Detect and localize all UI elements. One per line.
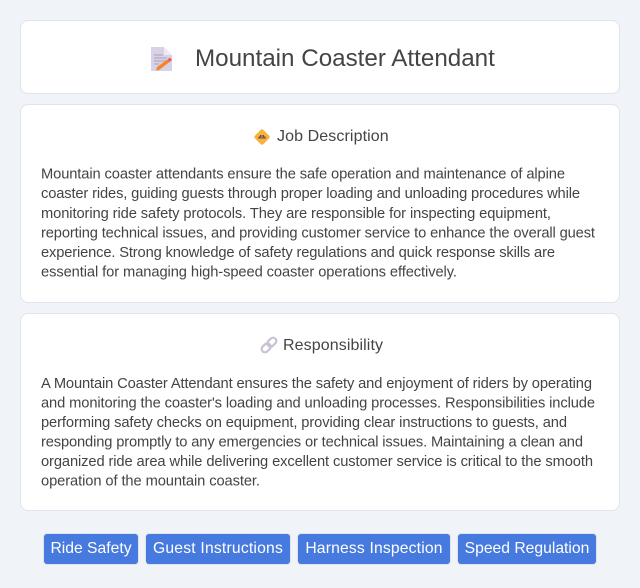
icon: link [260,336,278,354]
icon: orange diamond sign [254,129,270,145]
heading: job description: Job Description [277,128,389,145]
icon: memo with pencil [151,47,172,71]
tag: speed regulation: Speed Regulation [465,540,589,557]
text block: job description [41,166,595,280]
title text: Mountain Coaster Attendant [195,45,495,72]
text block: responsibility: organized ride area while delivering excellent customer service is critical to the smooth [41,454,593,470]
text block: job description: reporting technical issues, and providing customer service to enhance the overall guest [41,226,595,242]
tag: guest instructions [146,534,290,564]
tag: ride safety [44,534,138,564]
text block: job description: essential for managing high-speed coaster operations effectively. [41,264,457,280]
text block: job description: coaster rides, guiding guests through proper loading and unloading procedures while [41,186,580,202]
text block: job description: experience. Strong knowledge of safety regulations and quick response skills are [41,245,555,261]
text block: job description: Mountain coaster attendants ensure the safe operation and maintenance of alpine [41,166,565,182]
panel: job description [20,104,620,303]
panel: responsibility [20,313,620,511]
tag: harness inspection [298,534,450,564]
text block: responsibility [41,376,595,490]
tag: ride safety: Ride Safety [50,540,132,557]
tag: speed regulation [458,534,596,564]
text block: job description: monitoring ride safety protocols. They are responsible for inspecting equipment, [41,206,551,222]
tag: harness inspection: Harness Inspection [305,540,443,557]
text block: responsibility: A Mountain Coaster Attendant ensures the safety and enjoyment of riders by operating [41,376,592,392]
text block: responsibility: performing safety checks on equipment, providing clear instructions to guests, and [41,415,567,431]
text block: responsibility: operation of the mountain coaster. [41,474,260,490]
panel: title [20,20,620,94]
tag: guest instructions: Guest Instructions [153,540,283,557]
text block: responsibility: and monitoring the coaster's loading and unloading processes. Responsibilities include [41,396,595,412]
heading: responsibility: Responsibility [283,337,383,354]
text block: responsibility: responding promptly to any emergencies or technical issues. Maintaining a clean and [41,434,583,450]
